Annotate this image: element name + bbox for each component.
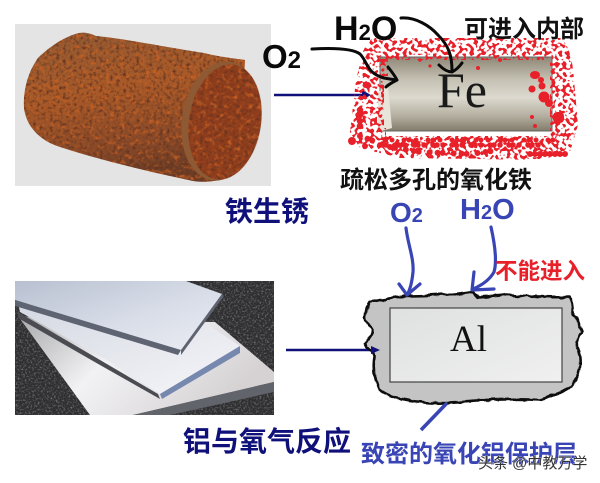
iron core block — [380, 57, 552, 131]
pointer line: dense layer — [421, 403, 447, 430]
individual large rust spots — [348, 58, 564, 149]
arrow: iron to rust layer — [274, 90, 371, 100]
aluminium core block — [390, 308, 562, 382]
watermark: 头条 @中教万学 — [478, 455, 587, 472]
heavy rust band along bottom — [360, 110, 566, 154]
Al label: Al — [450, 319, 487, 360]
arrow: oxygen blocked by layer — [399, 228, 420, 295]
arrow: water into iron — [401, 18, 462, 72]
photo: rusty iron pipe — [15, 24, 271, 186]
arrowhead: aluminium pointer — [371, 346, 380, 354]
label: H2O blue: H2O — [460, 194, 515, 226]
photo: aluminium plates — [15, 281, 274, 415]
label: loose porous iron oxide: 疏松多孔的氧化铁 — [340, 167, 532, 194]
arrow: oxygen into iron — [312, 49, 397, 87]
arrow: water blocked by layer — [472, 227, 495, 290]
dense oxide layer outline — [365, 291, 582, 403]
exposed gap at core left — [378, 86, 392, 132]
label: O2 black: O2 — [262, 38, 301, 75]
label: dense aluminium oxide protective layer: 致密的氧化铝保护层 — [361, 440, 577, 468]
arrow: aluminium to oxide layer — [286, 349, 380, 351]
label: cannot enter: 不能进入 — [495, 259, 585, 284]
label: aluminium reacts with oxygen: 铝与氧气反应 — [183, 426, 351, 457]
label: H2O black: H2O — [334, 10, 397, 48]
diagram: iron core with porous rust — [348, 38, 578, 160]
diagram: aluminium with dense oxide layer — [365, 291, 582, 403]
label: can enter interior: 可进入内部 — [464, 16, 584, 43]
label: O2 blue: O2 — [390, 197, 423, 228]
red porous iron oxide particles — [350, 38, 578, 160]
Fe label: Fe — [437, 62, 487, 118]
label: iron rusting: 铁生锈 — [225, 196, 309, 227]
